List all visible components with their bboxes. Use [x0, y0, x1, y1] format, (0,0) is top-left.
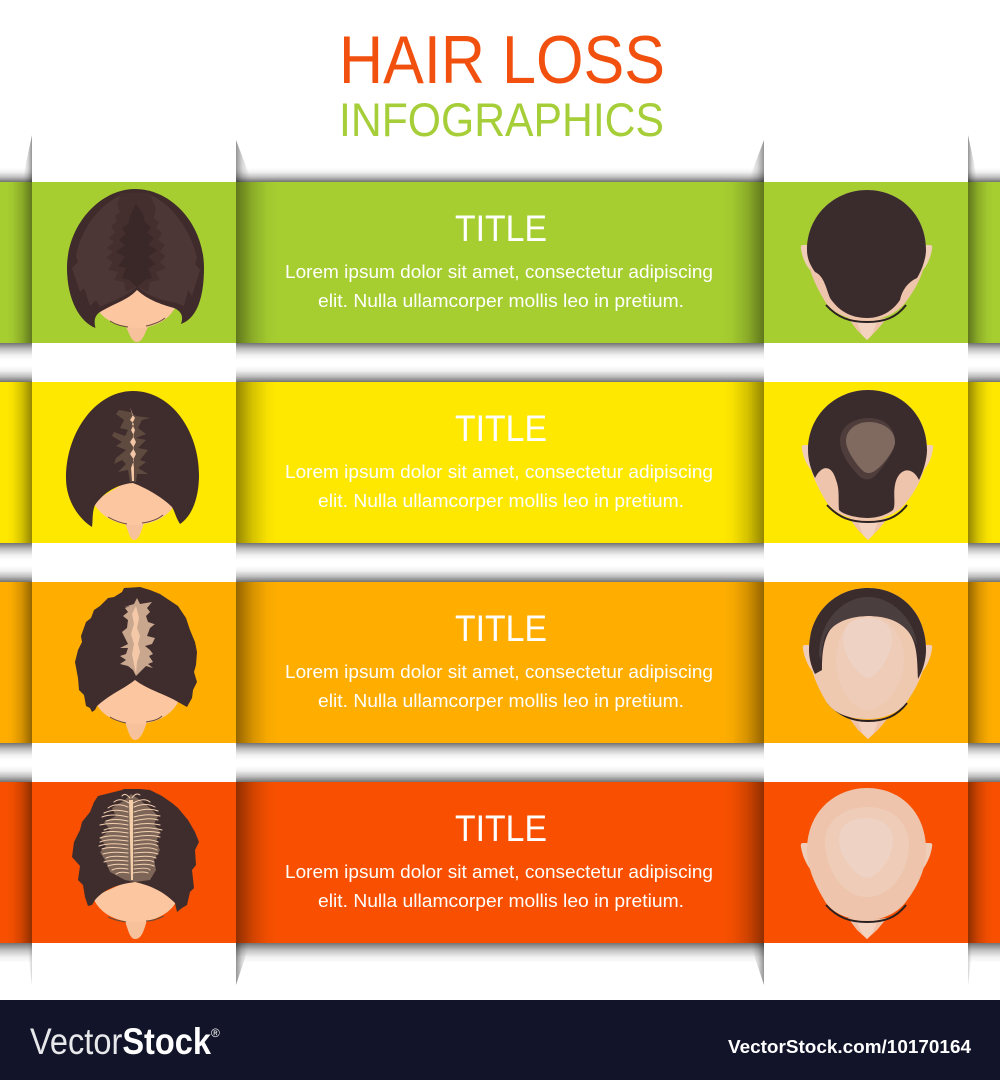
text block 2: TITLE: [455, 408, 547, 449]
fold shadows: column tails: [22, 135, 978, 985]
icon: female head stage 2: [66, 391, 199, 540]
heading: hair loss: HAIR LOSS: [339, 22, 665, 98]
icon: male head stage 2: [802, 390, 933, 540]
text block 2: [285, 408, 713, 511]
icon: female head stage 4: [72, 789, 199, 939]
panel: left column: [32, 130, 236, 990]
text block 4: [285, 808, 713, 911]
text block 4: elit. Nulla ullamcorper mollis leo in pretium.: [318, 890, 684, 911]
text block 3: elit. Nulla ullamcorper mollis leo in pretium.: [318, 690, 684, 711]
logo: vectorstock: VectorStock: [30, 1021, 211, 1062]
text block 4: TITLE: [455, 808, 547, 849]
panel: right column: [764, 130, 968, 990]
text block 3: Lorem ipsum dolor sit amet, consectetur adipiscing: [285, 661, 713, 682]
logo: registered mark: ®: [211, 1026, 220, 1040]
icon: male head stage 3: [803, 588, 932, 739]
title: [339, 22, 665, 146]
heading: infographics: INFOGRAPHICS: [339, 93, 664, 146]
icon: female head stage 1: [67, 189, 204, 342]
band: yellow: [0, 366, 1000, 560]
icon: female head stage 3: [75, 587, 197, 740]
band: orange: [0, 566, 1000, 760]
text block 3: [285, 608, 713, 711]
text block 3: TITLE: [455, 608, 547, 649]
text block 1: elit. Nulla ullamcorper mollis leo in pretium.: [318, 290, 684, 311]
text block 1: TITLE: [455, 208, 547, 249]
text block 1: Lorem ipsum dolor sit amet, consectetur adipiscing: [285, 261, 713, 282]
band: green: [0, 168, 1000, 360]
band: red orange: [0, 766, 1000, 963]
text block 2: Lorem ipsum dolor sit amet, consectetur adipiscing: [285, 461, 713, 482]
text block 1: [285, 208, 713, 311]
icon: male head stage 1: [801, 190, 932, 340]
footer link: VectorStock.com/10170164: [728, 1037, 971, 1057]
text block 4: Lorem ipsum dolor sit amet, consectetur adipiscing: [285, 861, 713, 882]
text block 2: elit. Nulla ullamcorper mollis leo in pretium.: [318, 490, 684, 511]
icon: male head stage 4: [801, 788, 932, 939]
footer bar: [0, 1000, 1000, 1080]
